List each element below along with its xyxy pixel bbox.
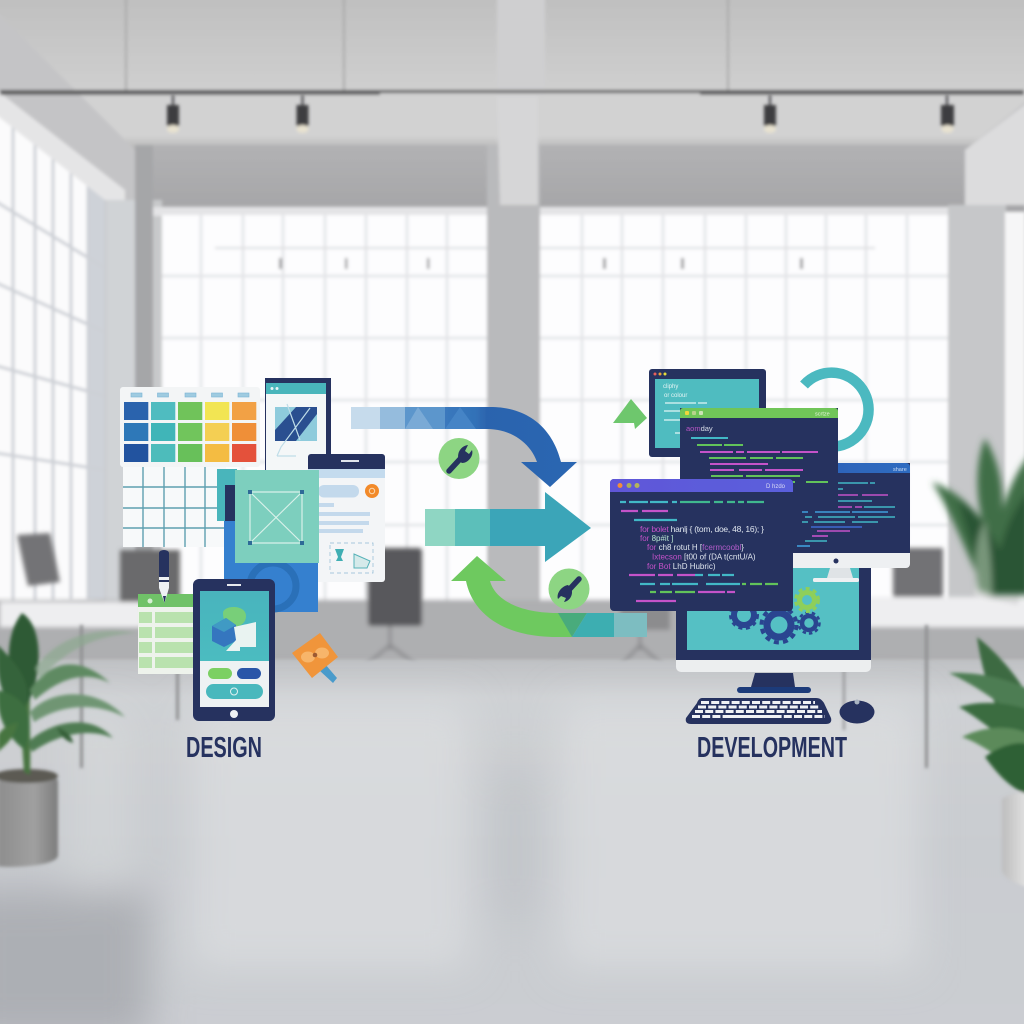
window: main code editor: for 8p#it ]	[640, 534, 673, 543]
window: main code editor: for Bot LhD Hubric)	[647, 562, 716, 571]
ring arc decoration	[804, 373, 869, 446]
left plant in pot	[0, 613, 137, 867]
icon: stylus pen	[159, 550, 169, 603]
window: green header editor: aomday	[686, 424, 713, 433]
icon: mouse	[840, 700, 874, 724]
smartphone mockup	[193, 579, 275, 721]
arrow: small green chevron	[613, 399, 647, 429]
teal card with dark side	[217, 469, 237, 522]
icon: 3D shapes	[212, 607, 256, 651]
ceiling and walls	[0, 0, 1024, 655]
window: main code editor: for ch8 rotut H [fcermcoobl}	[647, 543, 744, 552]
arrow: middle teal straight	[425, 492, 591, 562]
panel: design cluster	[120, 378, 385, 764]
window: green header editor: scrtze	[815, 412, 830, 418]
arrow: bottom green curved	[451, 556, 647, 637]
window: teal editor back	[649, 369, 766, 457]
furniture and floor	[0, 533, 1024, 675]
arrow: top blue curved	[351, 407, 577, 487]
monitor	[676, 565, 871, 693]
spreadsheet card	[138, 594, 194, 674]
center beam	[497, 0, 545, 205]
wireframe grid sheet	[123, 465, 226, 547]
right beam	[965, 98, 1024, 205]
window: green header editor	[680, 408, 838, 498]
icon: wrench badge upper	[438, 438, 480, 479]
tablet wireframe card	[265, 378, 331, 473]
reflected track lights	[279, 258, 803, 269]
window: blue header editor	[790, 463, 910, 582]
colour palette card	[120, 387, 260, 467]
mobile UI mockup card	[308, 454, 385, 582]
back window mullions	[162, 215, 948, 605]
window: main code editor: Ixtecson [t00 of (DA t(cntU/A)	[652, 552, 756, 562]
window: teal editor back: cliphy	[663, 384, 678, 390]
blue panel with ring	[224, 521, 318, 612]
icon: wrench badge lower	[548, 568, 590, 610]
window: main code editor: D hzdo	[766, 484, 786, 490]
window: teal editor back: or colour	[664, 393, 687, 399]
label: Design: DESIGN	[186, 732, 262, 764]
teal wireframe square	[235, 470, 319, 563]
icon: orange sign tool	[292, 633, 338, 683]
label: Development: DEVELOPMENT	[697, 732, 847, 764]
floor reflections	[0, 700, 920, 1024]
left window wall	[0, 107, 105, 605]
window: main code editor: for bolet hanlj { (tom, doe, 48, 16); }	[640, 524, 764, 534]
window: main code editor	[610, 479, 793, 611]
right plant in pot	[949, 637, 1024, 888]
window: blue header editor: share	[893, 467, 907, 473]
keyboard	[686, 698, 831, 724]
right background plant	[932, 438, 1024, 595]
arrows: workflow between design and development	[351, 399, 647, 637]
ceiling track lights	[167, 95, 954, 133]
panel: development cluster	[610, 369, 910, 764]
icon: gears	[730, 588, 820, 642]
